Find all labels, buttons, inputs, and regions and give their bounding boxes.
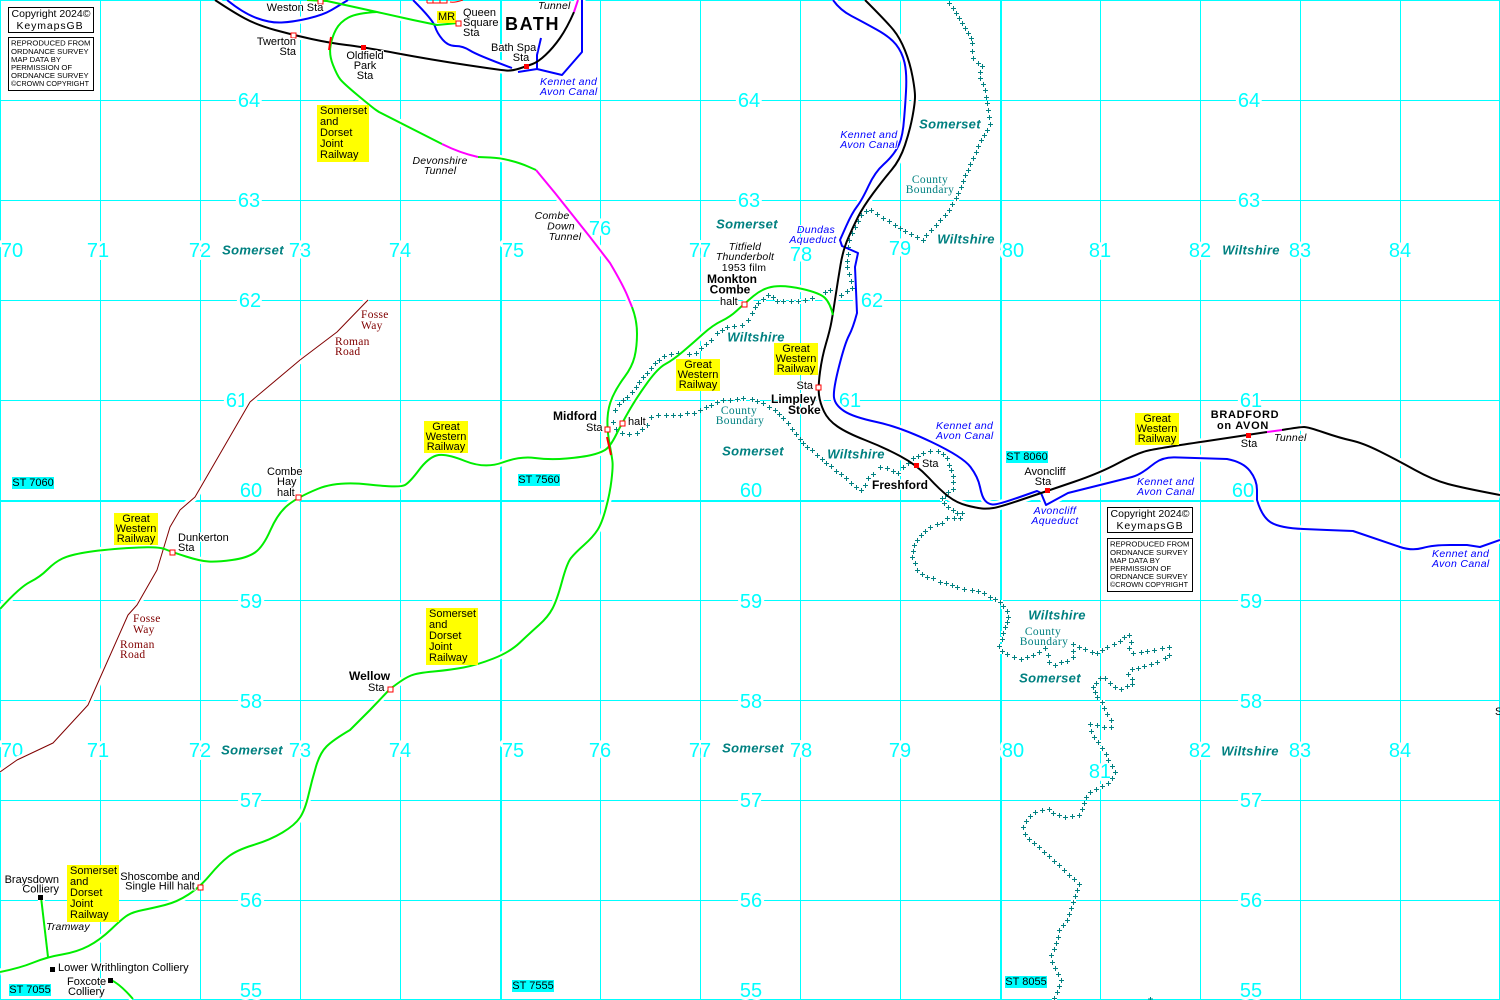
Fosse Way labels <box>120 309 389 661</box>
station labels: Sta <box>463 27 480 39</box>
yellow railway name labels: Somerset <box>70 865 117 877</box>
yellow railway name labels: Dorset <box>429 630 461 642</box>
county names: Wiltshire <box>727 330 785 344</box>
grid reference numbers: 63 <box>1238 190 1260 212</box>
grid reference numbers: 58 <box>240 691 262 713</box>
canal labels: Avoncliff <box>1034 505 1076 517</box>
grid reference numbers: 84 <box>1389 740 1411 762</box>
yellow railway name labels: Somerset <box>320 105 367 117</box>
station labels: Combe <box>710 282 751 296</box>
yellow railway name labels: Railway <box>320 149 359 161</box>
grid reference numbers: 63 <box>238 190 260 212</box>
county names: Somerset <box>722 740 784 756</box>
station labels: Sta <box>796 380 814 392</box>
station labels: Stoke <box>788 403 821 417</box>
yellow railway name labels: Railway <box>70 909 109 921</box>
station labels: Queen <box>463 7 496 19</box>
grid reference numbers: 57 <box>1240 790 1262 812</box>
copyright box top left: MAP DATA BY <box>11 54 61 64</box>
copyright box centre right: Copyright 2024© <box>1111 508 1189 520</box>
copyright box top left: REPRODUCED FROM <box>11 38 90 48</box>
grid reference numbers: 73 <box>289 240 311 262</box>
grid reference numbers: 61 <box>839 390 861 412</box>
canal labels: Aqueduct <box>1030 515 1079 527</box>
grid reference numbers: 70 <box>1 740 23 762</box>
stray boundary cross at bottom edge <box>1148 997 1153 1000</box>
copyright box centre right: PERMISSION OF <box>1110 564 1171 572</box>
cyan grid square labels: ST 7060 <box>12 477 54 489</box>
station labels: halt <box>277 487 295 499</box>
yellow railway name labels: Western <box>116 523 156 535</box>
cyan grid square labels <box>9 451 1500 996</box>
Fosse Way labels: Road <box>120 649 145 661</box>
red bridge marks <box>329 0 611 455</box>
grid reference numbers: 80 <box>1002 240 1024 262</box>
canal labels: Kennet and <box>1137 476 1194 488</box>
cyan grid square labels: ST 7560 <box>518 474 560 486</box>
yellow railway name labels: Great <box>122 513 150 525</box>
Fosse Way labels: Road <box>335 346 360 358</box>
station labels: Shoscombe and <box>120 871 200 883</box>
station labels: BATH <box>505 14 560 34</box>
yellow railway name labels: Great <box>432 421 460 433</box>
film note: 1953 film <box>722 262 766 274</box>
county names: Wiltshire <box>827 446 885 462</box>
county boundary labels: County <box>1025 626 1061 638</box>
cyan grid square labels: ST 8060 <box>1006 451 1048 463</box>
grid reference numbers: 75 <box>502 240 524 262</box>
yellow railway name labels: Joint <box>320 138 343 150</box>
station labels: Freshford <box>872 478 928 492</box>
grid reference numbers: 59 <box>240 591 262 613</box>
yellow railway name labels: MR <box>438 11 455 23</box>
grid reference numbers: 59 <box>1240 591 1262 613</box>
grid reference numbers: 83 <box>1289 240 1311 262</box>
grid reference numbers: 83 <box>1289 740 1311 762</box>
Fosse Way labels: Fosse <box>133 613 161 625</box>
Great Western main line <box>215 0 1500 509</box>
station labels: Square <box>463 17 498 29</box>
grid reference numbers: 81 <box>1089 761 1111 783</box>
county names: Wiltshire <box>1221 744 1279 758</box>
station labels: Hay <box>277 476 297 488</box>
yellow railway name labels: Dorset <box>320 127 352 139</box>
grid reference numbers: 78 <box>790 740 812 762</box>
county names: Wiltshire <box>1222 242 1280 258</box>
station labels: Sta <box>586 422 603 434</box>
grid reference numbers: 56 <box>1240 890 1262 912</box>
station labels: Foxcote <box>67 976 106 988</box>
tunnel and tramway labels: Combe <box>535 210 569 222</box>
station labels: Sta <box>279 46 297 58</box>
station labels: Colliery <box>22 884 59 896</box>
copyright box top left: PERMISSION OF <box>11 62 72 72</box>
copyright box top left: ORDNANCE SURVEY <box>11 70 89 80</box>
yellow railway name labels: Western <box>1137 423 1177 435</box>
Fosse Way labels: Roman <box>120 639 155 651</box>
yellow railway name labels: Railway <box>117 533 156 545</box>
cyan grid square labels: ST 7555 <box>512 980 554 992</box>
county names <box>221 116 1280 758</box>
station labels: Lower Writhlington Colliery <box>58 962 189 974</box>
Kennet and Avon Canal <box>227 0 1500 549</box>
grid reference numbers: 64 <box>738 90 760 112</box>
branch railways in green <box>0 0 833 999</box>
grid reference numbers: 72 <box>189 240 211 262</box>
yellow railway name labels: Great <box>782 343 810 355</box>
station labels: Oldfield <box>346 50 384 62</box>
grid reference numbers: 77 <box>689 740 711 762</box>
canal labels: Avon Canal <box>1431 558 1490 570</box>
Fosse Way labels: Way <box>133 624 155 636</box>
station labels: Combe <box>267 466 302 478</box>
grid reference numbers: 72 <box>189 740 211 762</box>
county names: Somerset <box>919 116 981 132</box>
station labels: Sta <box>1035 476 1052 488</box>
grid reference numbers: 82 <box>1189 240 1211 262</box>
cyan grid square labels: ST 7055 <box>9 984 51 996</box>
yellow railway name labels: Railway <box>777 363 816 375</box>
county names: Somerset <box>221 742 283 758</box>
yellow railway name labels: Dorset <box>70 887 102 899</box>
grid reference numbers: 84 <box>1389 240 1411 262</box>
grid reference numbers: 58 <box>740 691 762 713</box>
canal labels <box>539 76 1490 570</box>
grid reference numbers: 56 <box>740 890 762 912</box>
copyright box centre right: ORDNANCE SURVEY <box>1110 548 1188 556</box>
Fosse Way labels: Fosse <box>361 309 389 321</box>
copyright box centre right: ORDNANCE SURVEY <box>1110 572 1188 580</box>
grid reference numbers: 74 <box>389 740 411 762</box>
film note: Titfield <box>729 241 761 253</box>
grid reference numbers: 76 <box>589 218 611 240</box>
station labels: Sta <box>513 52 530 64</box>
station labels: Sta <box>1241 438 1258 450</box>
copyright box top left: Copyright 2024© <box>12 8 90 20</box>
copyright box top left <box>8 8 94 90</box>
station labels: BRADFORD <box>1211 409 1279 421</box>
grid reference numbers: 73 <box>289 740 311 762</box>
station labels: Weston Sta <box>267 2 324 14</box>
canal labels: Avon Canal <box>839 139 898 151</box>
grid reference numbers: 82 <box>1189 740 1211 762</box>
station labels: Avoncliff <box>1024 466 1066 478</box>
copyright box centre right: REPRODUCED FROM <box>1110 540 1189 548</box>
station labels: Sta <box>368 682 385 694</box>
grid reference numbers: 63 <box>738 190 760 212</box>
grid reference numbers: 62 <box>239 290 261 312</box>
county boundary labels: County <box>912 174 948 186</box>
grid reference numbers: 79 <box>889 238 911 260</box>
Fosse Way labels: Way <box>361 320 383 332</box>
tunnel and tramway labels: Tunnel <box>549 231 582 243</box>
railway tunnels in magenta <box>442 0 1282 432</box>
grid reference numbers: 70 <box>1 240 23 262</box>
county boundary labels: Boundary <box>1020 636 1068 648</box>
tunnel and tramway labels: Tramway <box>46 921 90 933</box>
tunnel and tramway labels: Tunnel <box>1274 432 1307 444</box>
station labels: Sta <box>922 458 939 470</box>
tunnel and tramway labels: Tunnel <box>538 0 571 12</box>
county names: Somerset <box>1019 670 1081 686</box>
county boundary labels: Boundary <box>906 184 954 196</box>
canal labels: Kennet and <box>540 76 597 88</box>
station labels: Colliery <box>68 986 105 998</box>
film note: Thunderbolt <box>716 251 775 263</box>
copyright box centre right: ©CROWN COPYRIGHT <box>1110 580 1189 588</box>
station labels: Sta <box>178 542 195 554</box>
grid reference numbers: 75 <box>502 740 524 762</box>
yellow railway name labels: Western <box>426 431 466 443</box>
Fosse Way labels: Roman <box>335 336 370 348</box>
station labels: Park <box>354 60 377 72</box>
station labels: Monkton <box>707 272 757 286</box>
grid reference numbers: 77 <box>689 240 711 262</box>
grid reference numbers: 60 <box>740 480 762 502</box>
grid reference numbers: 57 <box>240 790 262 812</box>
station labels: halt <box>628 416 646 428</box>
county names: Wiltshire <box>937 232 995 246</box>
yellow railway name labels: Great <box>1143 413 1171 425</box>
tunnel and tramway labels: Devonshire <box>412 155 468 167</box>
county names: Wiltshire <box>1028 608 1086 622</box>
grid reference numbers: 60 <box>240 480 262 502</box>
grid reference numbers: 61 <box>226 390 248 412</box>
yellow railway name labels: Somerset <box>429 608 476 620</box>
county names: Somerset <box>722 444 784 458</box>
grid reference numbers: 60 <box>1232 480 1254 502</box>
tunnel and tramway labels <box>46 0 1307 933</box>
station markers <box>38 0 1251 983</box>
grid reference numbers: 79 <box>889 740 911 762</box>
station labels: on AVON <box>1217 420 1269 432</box>
copyright box centre right: MAP DATA BY <box>1110 556 1160 564</box>
station labels: Braysdown <box>5 874 59 886</box>
yellow railway name labels: Railway <box>1138 433 1177 445</box>
canal labels: Aqueduct <box>788 234 837 246</box>
grid reference numbers: 64 <box>238 90 260 112</box>
county boundary crosses <box>613 3 1169 998</box>
yellow railway name labels: and <box>70 876 88 888</box>
cyan grid square labels: ST 8055 <box>1005 976 1047 988</box>
grid reference numbers: 80 <box>1002 740 1024 762</box>
grid reference numbers: 57 <box>740 790 762 812</box>
grid reference numbers: 76 <box>589 740 611 762</box>
canal labels: Kennet and <box>840 129 898 141</box>
yellow railway name labels: Railway <box>427 441 466 453</box>
station labels: Limpley <box>771 392 817 406</box>
grid reference numbers: 64 <box>1238 90 1260 112</box>
yellow railway name labels: Joint <box>429 641 452 653</box>
grid reference numbers: 61 <box>1240 390 1262 412</box>
station labels: Sta <box>357 70 374 82</box>
yellow railway name labels: Western <box>678 369 718 381</box>
station labels: Wellow <box>349 669 391 683</box>
tunnel and tramway labels: Down <box>547 220 575 232</box>
station labels: Midford <box>553 409 597 423</box>
copyright box top left: KeymapsGB <box>16 20 84 32</box>
yellow railway name labels: Railway <box>679 379 718 391</box>
county boundary labels: County <box>721 405 757 417</box>
grid reference numbers: 58 <box>1240 691 1262 713</box>
canal labels: Avon Canal <box>935 430 994 442</box>
canal labels: Dundas <box>797 224 835 236</box>
station labels: Bath Spa <box>491 42 537 54</box>
tunnel and tramway labels: Tunnel <box>424 165 457 177</box>
county boundary labels <box>716 174 1068 648</box>
county names: Somerset <box>222 242 284 258</box>
Fosse Way roman road <box>0 300 368 772</box>
grid reference numbers: 56 <box>240 890 262 912</box>
station labels: Twerton <box>257 36 296 48</box>
station labels: Single Hill halt <box>125 880 195 892</box>
grid reference numbers: 71 <box>87 240 109 262</box>
copyright box top left: ©CROWN COPYRIGHT <box>11 78 90 88</box>
copyright box centre right: KeymapsGB <box>1116 520 1184 532</box>
grid reference numbers: 81 <box>1089 240 1111 262</box>
county boundary labels: Boundary <box>716 415 764 427</box>
yellow railway name labels <box>67 11 1179 922</box>
grid reference numbers: 62 <box>861 290 883 312</box>
canal labels: Kennet and <box>1432 548 1489 560</box>
station labels: halt <box>720 296 738 308</box>
yellow railway name labels: and <box>320 116 338 128</box>
yellow railway name labels: and <box>429 619 447 631</box>
canal labels: Avon Canal <box>539 86 598 98</box>
grid reference numbers: 59 <box>740 591 762 613</box>
yellow railway name labels: Great <box>684 359 712 371</box>
county names: Somerset <box>716 216 778 232</box>
canal labels: Avon Canal <box>1136 486 1195 498</box>
canal labels: Kennet and <box>936 420 993 432</box>
yellow railway name labels: Railway <box>429 652 468 664</box>
station labels: Dunkerton <box>178 532 229 544</box>
grid reference numbers: 74 <box>389 240 411 262</box>
grid reference numbers: 78 <box>790 244 812 266</box>
copyright box centre right <box>1108 508 1192 592</box>
grid reference numbers: 71 <box>87 740 109 762</box>
yellow railway name labels: Western <box>776 353 816 365</box>
yellow railway name labels: Joint <box>70 898 93 910</box>
copyright box top left: ORDNANCE SURVEY <box>11 46 89 56</box>
